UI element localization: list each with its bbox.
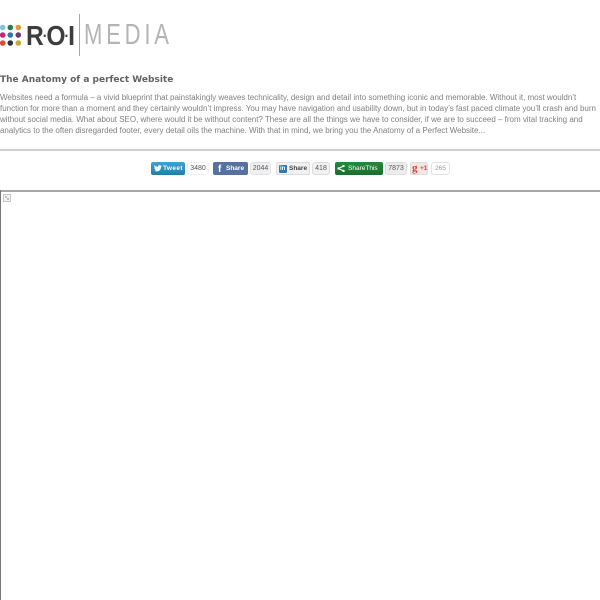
button: ShareThis: ShareThis	[348, 165, 378, 172]
button: Google +1	[410, 162, 428, 175]
frame left edge	[0, 190, 1, 600]
logo: ROI Media	[0, 14, 173, 56]
count: LinkedIn	[312, 162, 330, 175]
intro text block: analytics to the often disregarded footer, every detail oils the machine. With that in mind, we bring you the Anatomy of a Perfect Website...	[0, 126, 485, 135]
button: LinkedIn Share	[276, 162, 310, 175]
title: The Anatomy of a perfect Website	[0, 75, 173, 85]
count: Tweet: 3480	[190, 165, 206, 172]
button: Tweet	[151, 162, 185, 175]
count: LinkedIn: 418	[315, 165, 327, 172]
icon: coloured dot grid	[0, 24, 22, 46]
intro text block: without social media. What about SEO, where would it be without content? These are all the things we have to consider, if we are to succeed – from vital tracking and	[0, 115, 583, 124]
count: ShareThis	[385, 162, 407, 175]
button: Google +1: +1	[420, 165, 427, 172]
count: Facebook	[250, 162, 271, 175]
button: ShareThis	[335, 162, 383, 175]
button: Facebook Share	[213, 162, 248, 175]
count: ShareThis: 7873	[388, 165, 404, 172]
button: LinkedIn Share: in	[280, 166, 285, 172]
social share bar	[151, 162, 450, 175]
button: Google +1: g	[412, 162, 418, 174]
divider	[0, 149, 600, 151]
logo wordmark: MEDIA: MEDIA	[84, 19, 173, 51]
count: Google: 265	[435, 165, 446, 172]
intro text block: Websites need a formula – a vivid blueprint that painstakingly weaves technicality, design and detail into something iconic and memorable. Without it, most wouldn’t	[0, 93, 576, 102]
intro text block	[0, 93, 596, 135]
button: Facebook Share: Share	[226, 165, 244, 172]
logo divider	[79, 14, 80, 56]
button: Facebook Share: f	[218, 164, 221, 175]
icon: broken image	[3, 194, 11, 202]
button: Tweet: Tweet	[163, 165, 183, 172]
intro text block: function for more than a moment and they certainly wouldn’t impress. You may have navigation and usability down, but in today’s fast paced climate you’ll crash and burn	[0, 104, 596, 113]
button: LinkedIn Share: Share	[289, 165, 307, 172]
count: Facebook: 2044	[253, 165, 268, 172]
divider	[0, 190, 600, 192]
count: Google	[431, 162, 450, 175]
logo wordmark: R.O.I: R·O·I	[26, 20, 75, 51]
count: Tweet	[187, 162, 209, 175]
broken image frame	[0, 190, 11, 600]
